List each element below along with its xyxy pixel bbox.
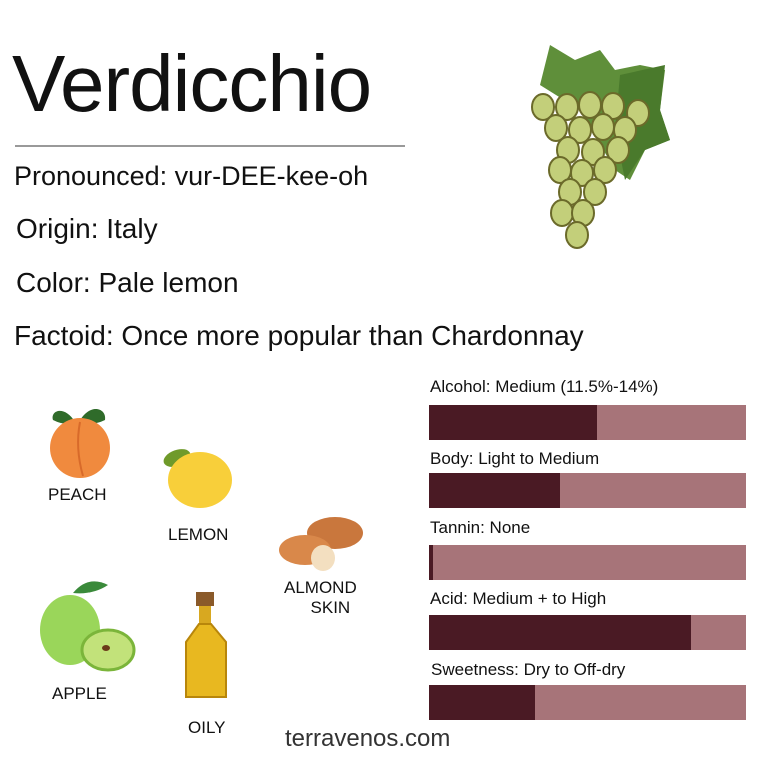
acid: Acid: Medium + to High [430,589,606,608]
sweetness: Sweetness: Dry to Off-dry [431,660,625,679]
label: peach: PEACH [48,485,107,504]
label: oily: OILY [188,718,225,737]
label: lemon: LEMON [168,525,228,544]
text: color: Color: Pale lemon [16,267,239,298]
icon: lemon [164,449,232,508]
label: almond skin [284,578,357,617]
chart: structure bars [429,377,746,720]
icon: peach [50,409,110,478]
title: Verdicchio [12,39,371,128]
label: almond skin: ALMOND [284,578,357,597]
icon: grapes [531,45,670,249]
icon: oil bottle [185,592,227,698]
text: factoid: Factoid: Once more popular than Chardonnay [14,320,584,351]
label: apple: APPLE [52,684,107,703]
icon: almonds [279,517,363,571]
icon: apple [40,581,136,672]
label: almond skin: SKIN [311,598,350,617]
text: pronounced: Pronounced: vur-DEE-kee-oh [14,161,368,191]
tannin: Tannin: None [430,518,530,537]
alcohol: Alcohol: Medium (11.5%-14%) [430,377,658,396]
footer: website: terravenos.com [285,725,450,752]
text: origin: Origin: Italy [16,213,158,244]
body: Body: Light to Medium [430,449,599,468]
